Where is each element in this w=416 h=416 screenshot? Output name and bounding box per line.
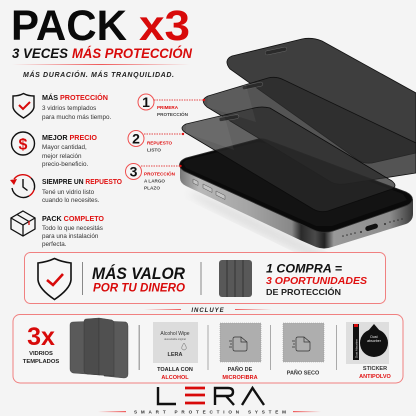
3x vidrios templados [23,323,59,365]
benefit: más protección: para mucho más tiempo. [42,114,112,121]
panel: incluye [13,314,403,383]
antipolvo sticker: absorber [367,339,382,343]
subtitle [12,46,192,61]
three glasses image [70,318,128,378]
heading: incluye [144,308,272,314]
text: 1 compra: 3 OPORTUNIDADES [266,276,367,287]
icon: shield [13,94,34,118]
callout 2: REPUESTO [147,140,173,146]
microfiber cloth: MICROFIBRA [222,375,258,381]
benefit: pack completo: Todo lo que necesitás [42,225,103,232]
glass 1 lower [182,107,395,212]
benefit: siempre un repuesto: cuando lo necesites. [42,197,100,204]
glass 2 middle [203,77,416,184]
text: 1 compra [266,264,367,297]
callout 2: 2 [132,130,140,146]
callout 1: PRIMERA [157,105,179,110]
towel: alcohol wipe: Alcohol Wipe [160,331,190,337]
benefit: mejor precio: MEJOR PRECIO [42,135,98,142]
port [365,223,379,232]
antipolvo sticker: ANTIPOLVO [359,374,392,380]
phone shadow [186,187,354,277]
callout 3: PROTECCIÓN [144,172,175,176]
text: 1 compra: DE PROTECCIÓN [266,286,341,297]
callout 3: PLAZO [144,186,161,190]
tagline: MÁS DURACIÓN. MÁS TRANQUILIDAD. [23,70,174,79]
callout 2 [128,130,184,152]
logo: LERA [98,387,321,414]
benefit: mejor precio [12,132,98,168]
benefit: más protección: 3 vidrios templados [42,105,96,112]
dry cloth: PAÑO SECO [287,370,320,376]
icon: three glasses [219,260,252,297]
3x vidrios templados: TEMPLADOS [23,359,59,365]
benefit: siempre un repuesto: Tené un vidrio listo [42,189,95,196]
towel: alcohol wipe: LERA [168,352,183,358]
towel: alcohol wipe: TOALLA CON [157,367,193,373]
benefit: siempre un repuesto [10,175,123,204]
text: 1 compra: 1 COMPRA = [266,264,342,276]
benefit: siempre un repuesto: SIEMPRE UN REPUESTO [42,179,123,186]
benefit: mejor precio: mejor relación [42,153,82,160]
towel: alcohol wipe: ALCOHOL [161,375,189,381]
text: más valor: POR TU DINERO [93,282,185,294]
title [11,2,190,50]
glass 3 top [227,38,416,163]
benefit: pack completo: PACK COMPLETO [42,216,105,223]
benefit: más protección: MÁS PROTECCIÓN [42,93,108,102]
panel: más valor [24,252,386,304]
benefit: pack completo: para una instalación [42,233,99,240]
phone body [180,139,413,248]
antipolvo sticker: STICKER [363,366,387,372]
subtitle: 3 VECES [12,46,68,61]
phone with three glass layers [180,38,416,277]
microfiber cloth [220,323,261,381]
title: PACK [11,2,127,50]
icon: dollar coin: $ [19,136,28,154]
subtitle: MÁS PROTECCIÓN [72,46,192,61]
text: más valor: MÁS VALOR [92,264,186,283]
callout 2: LISTO [147,148,162,152]
callout 3: 3 [130,164,138,180]
callout 3 [126,164,182,190]
callout 1: PROTECCIÓN [157,112,188,117]
antipolvo sticker: Dust Absorber [354,339,358,358]
antipolvo sticker: Dust [370,335,378,339]
benefit: pack completo: perfecta. [42,241,67,248]
3x vidrios templados: VIDRIOS [29,351,53,357]
glass sheen [186,85,256,150]
benefit: pack completo [11,211,105,248]
benefit: mejor precio: Mayor cantidad, [42,144,87,151]
icon: clock [10,175,35,197]
callout 3: A LARGO [144,178,166,184]
callout 1: 1 [142,94,150,110]
towel: alcohol wipe [153,322,198,381]
title: x3 [139,2,190,50]
3x vidrios templados: 3x [27,323,55,351]
benefit: más protección [13,93,112,121]
text: más valor [92,264,186,294]
heading: incluye: INCLUYE [191,308,225,314]
logo: LERA: SMART PROTECTION SYSTEM [134,410,286,414]
icon: shield check [38,258,71,300]
icon: box [11,211,35,236]
side buttons [193,179,225,200]
benefit: mejor precio: precio-beneficio. [42,161,88,168]
antipolvo sticker [346,322,392,380]
microfiber cloth: PAÑO DE [228,366,253,373]
towel: alcohol wipe: descartable original [164,338,186,341]
callout 1 [138,94,205,117]
dry cloth [283,323,324,376]
